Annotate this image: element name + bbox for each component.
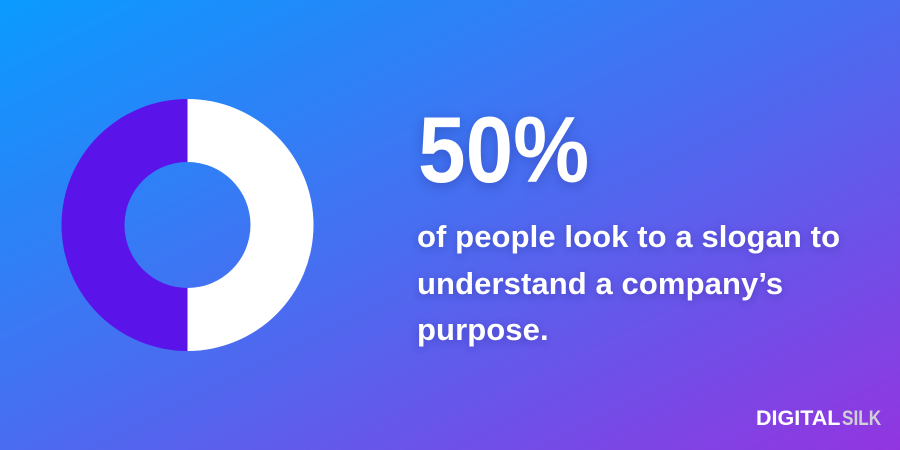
segment: remaining purple (62, 99, 188, 351)
logo: Digital Silk: SILK (842, 406, 881, 430)
segment: 50% white (188, 99, 314, 351)
description text (416, 219, 840, 348)
logo: Digital Silk (756, 406, 881, 430)
description text: of people look to a slogan to (417, 219, 840, 254)
description text: understand a company’s (417, 266, 783, 300)
logo: Digital Silk: DIGITAL (756, 406, 840, 430)
headline statistic: 50% (418, 97, 589, 202)
description text: purpose. (417, 312, 549, 347)
